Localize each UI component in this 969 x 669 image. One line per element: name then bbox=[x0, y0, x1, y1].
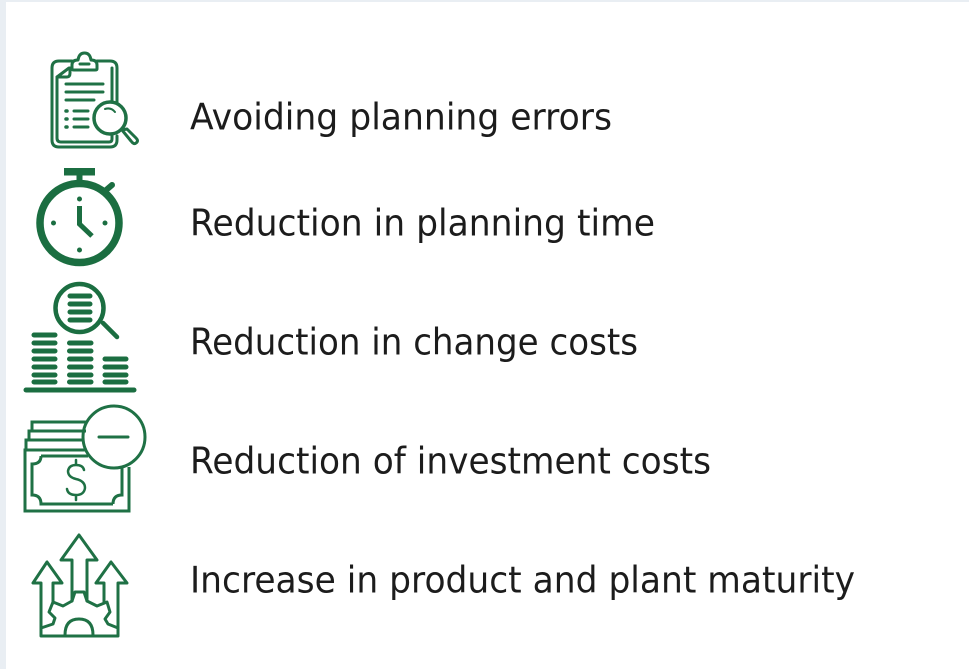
label: Reduction in planning time: Reduction in planning time bbox=[190, 202, 655, 244]
icon: arrows rising from gear bbox=[33, 535, 127, 636]
label: Increase in product and plant maturity: Increase in product and plant maturity bbox=[190, 558, 855, 602]
label: Avoiding planning errors: Avoiding planning errors bbox=[190, 96, 612, 138]
icon: coin stacks with magnifier bbox=[26, 284, 134, 390]
icon: banknotes with minus bbox=[25, 406, 145, 511]
icon: clipboard with magnifier bbox=[52, 53, 138, 147]
icon: stopwatch bbox=[40, 168, 119, 262]
label: Reduction of investment costs: Reduction of investment costs bbox=[190, 440, 711, 482]
label: Reduction in change costs: Reduction in change costs bbox=[190, 320, 638, 364]
